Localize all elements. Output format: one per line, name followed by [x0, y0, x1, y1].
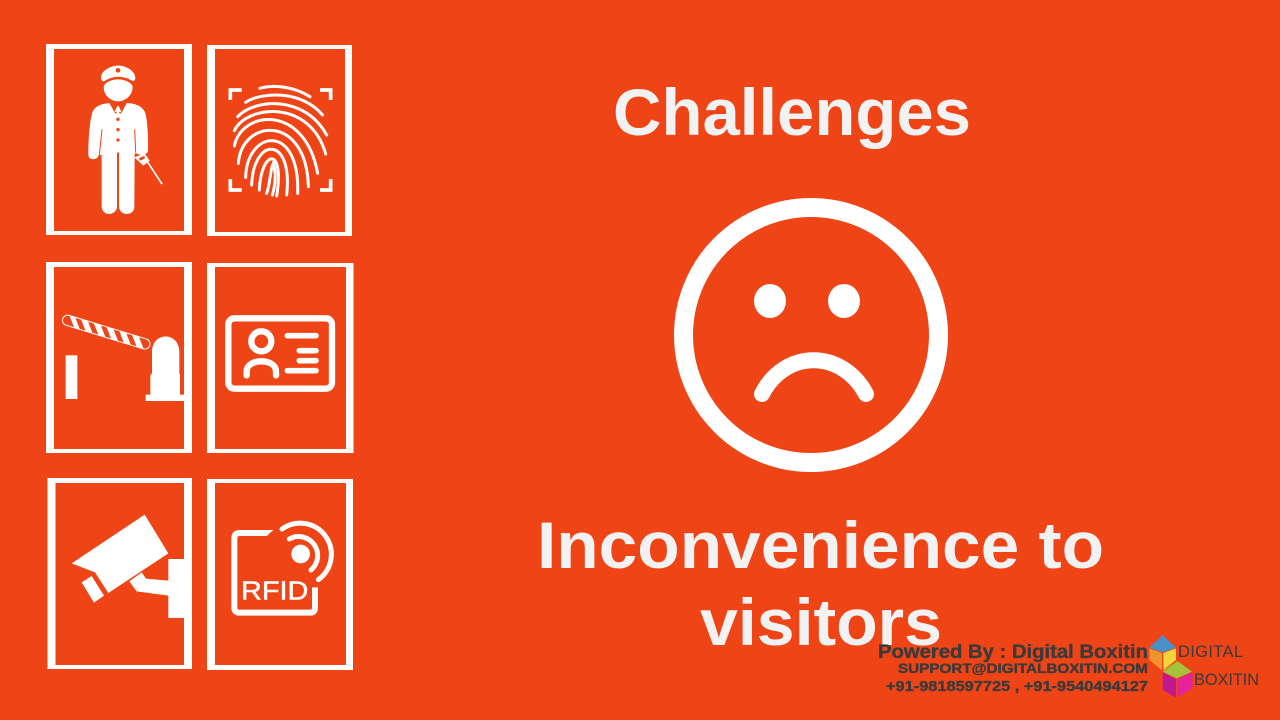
panel: RFID — [207, 479, 353, 670]
logo: Digital Boxitin: BOXITIN — [1194, 671, 1259, 689]
heading: Challenges: Challenges — [613, 75, 971, 149]
footer: contact details: SUPPORT@DIGITALBOXITIN.COM — [898, 661, 1148, 676]
footer: contact details — [878, 642, 1148, 695]
panel: boom barrier — [46, 262, 192, 453]
label: RFID: RFID — [241, 575, 308, 605]
icon: sad face — [684, 208, 938, 462]
icon: boom barrier — [61, 313, 184, 401]
icon: fingerprint — [230, 86, 331, 196]
icon: CCTV camera — [72, 515, 185, 618]
icon: ID card — [228, 318, 332, 389]
panel: CCTV camera — [48, 478, 192, 669]
icon: RFID tag — [234, 523, 331, 613]
panel: fingerprint — [207, 45, 352, 236]
panel: security guard — [46, 44, 192, 235]
text: Inconvenience to visitors: visitors — [700, 585, 942, 659]
logo: Digital Boxitin: DIGITAL — [1178, 643, 1243, 661]
footer: contact details: +91-9818597725 , +91-9540494127 — [886, 679, 1148, 695]
text: Inconvenience to visitors: Inconvenience to — [537, 508, 1104, 582]
text: Inconvenience to visitors — [537, 508, 1104, 659]
logo: Digital Boxitin — [1149, 635, 1259, 698]
footer: contact details: Powered By : Digital Boxitin — [878, 642, 1148, 663]
panel: ID card — [207, 263, 354, 453]
icon: security guard — [88, 66, 162, 214]
